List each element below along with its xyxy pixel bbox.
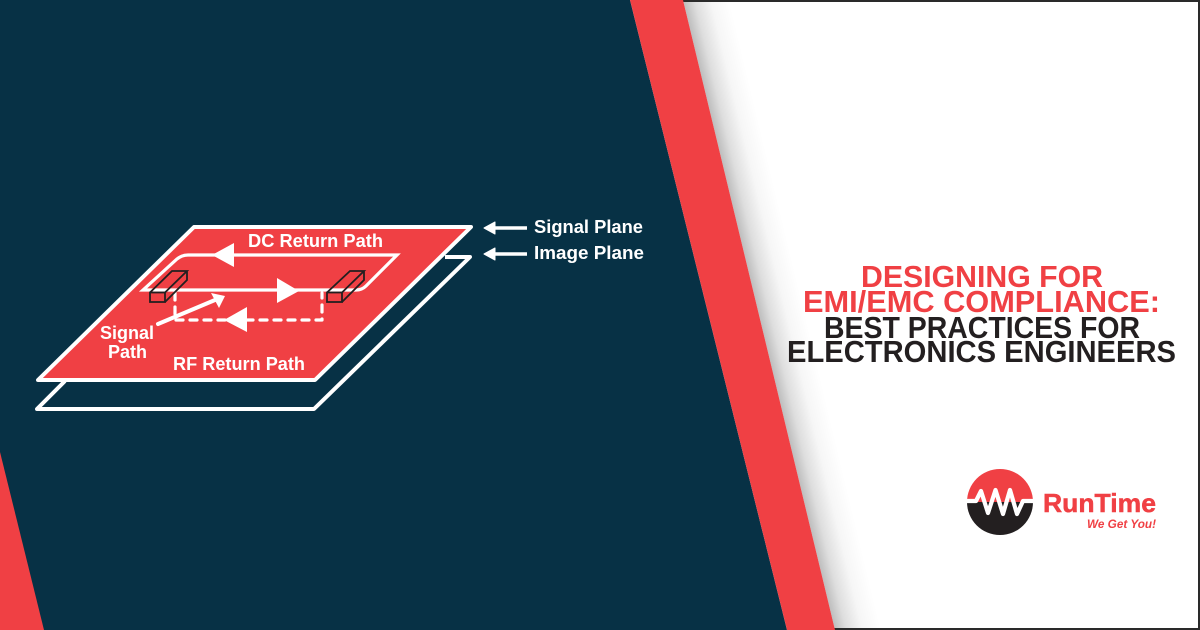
icon: waveform circle (967, 469, 1033, 535)
title: BEST PRACTICES FOR (824, 311, 1140, 345)
label: Signal: Signal (100, 322, 154, 343)
signal path pointer arrow (158, 293, 225, 324)
label: DC Return Path: DC Return Path (248, 230, 383, 251)
callout: Signal Plane (484, 216, 643, 237)
callout: Signal Plane: Signal Plane (534, 216, 643, 237)
title: EMI/EMC COMPLIANCE: (803, 285, 1160, 319)
signal path forward arrow (277, 278, 299, 303)
DC return path line (143, 243, 397, 290)
title: ELECTRONICS ENGINEERS (787, 335, 1176, 369)
red diagonal band (630, 0, 835, 630)
panel: white title background (600, 0, 1200, 630)
label: RF Return Path: RF Return Path (173, 353, 305, 374)
logo: RunTime (967, 469, 1156, 535)
image plane outline (37, 257, 470, 409)
label: Path: Path (108, 341, 147, 362)
RF return path dashed line (175, 293, 322, 332)
left component block (150, 271, 187, 302)
logo wordmark: RunTime (1043, 488, 1156, 518)
right component block (327, 271, 364, 302)
title: DESIGNING FOR (861, 260, 1103, 294)
diagram: planes and return paths (37, 227, 471, 409)
red corner triangle (0, 452, 44, 630)
logo tagline: We Get You! (1087, 519, 1156, 531)
panel: navy background (0, 0, 787, 630)
title (787, 260, 1176, 369)
callout: Image Plane (484, 242, 644, 263)
callout: Image Plane: Image Plane (534, 242, 644, 263)
signal plane (38, 227, 471, 380)
